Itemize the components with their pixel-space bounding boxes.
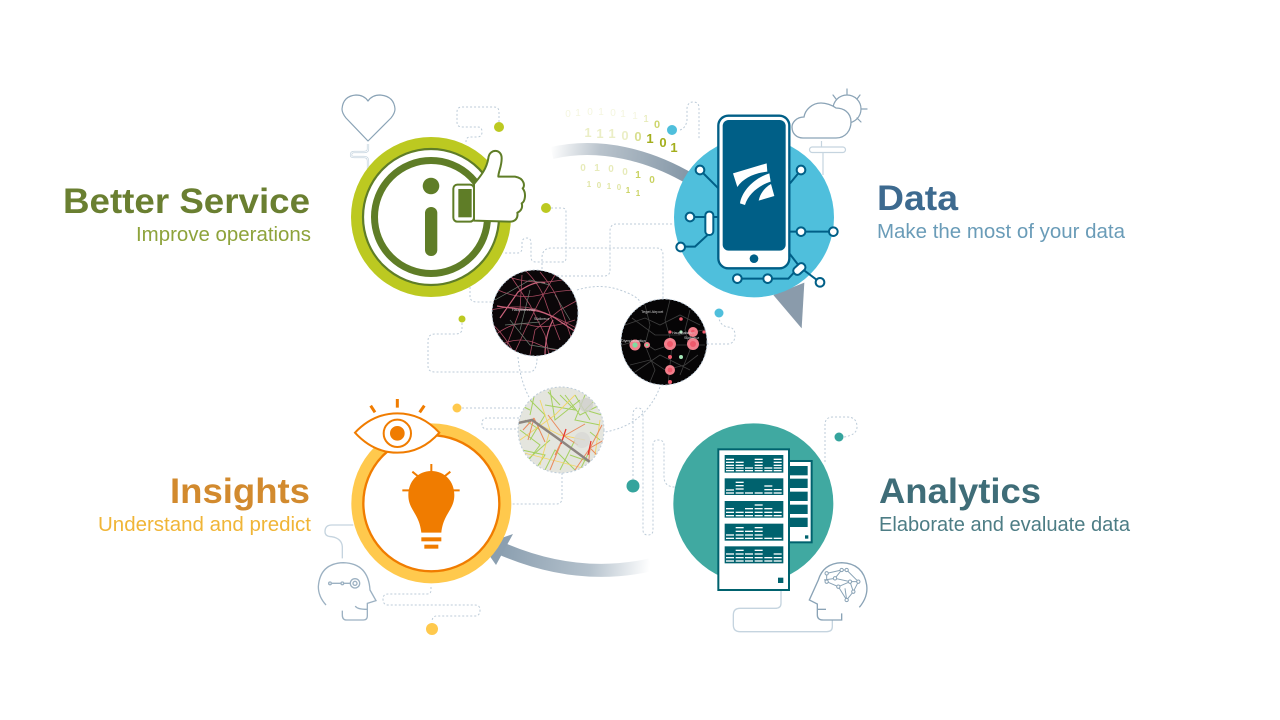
- map: station hot spots: Hauptbahnhof: [672, 331, 695, 335]
- panel: analytics icon: [673, 423, 867, 632]
- icon: front server: [718, 449, 789, 590]
- server level bars: [726, 459, 782, 562]
- heading: better service: Improve operations: [136, 224, 311, 246]
- panel: data icon: [674, 116, 838, 328]
- panel: better service icon: [342, 95, 525, 297]
- tube below server: [733, 591, 832, 632]
- heading: data: [877, 179, 1126, 243]
- map: station hot spots: Olympiastadion: [621, 339, 646, 343]
- icon: smartphone: [718, 116, 789, 268]
- heading: analytics: Analytics: [879, 472, 1041, 511]
- binary digits: 10: [635, 170, 655, 186]
- binary digits: 0: [634, 129, 642, 144]
- heading: insights: Insights: [170, 472, 310, 511]
- icon: cloud and sun: [792, 89, 867, 175]
- circuit traces: [681, 170, 833, 282]
- binary digits: 0: [654, 119, 660, 131]
- icon: speech tail: [773, 283, 804, 328]
- map: station hot spots: Tegel Airport: [641, 309, 664, 314]
- icon: tube to head: [325, 525, 353, 558]
- icon: head with node line: [318, 563, 376, 620]
- heading: analytics: Elaborate and evaluate data: [879, 514, 1131, 536]
- icon: light bulb: [402, 464, 460, 549]
- icon: ring: [351, 423, 511, 583]
- panel: insights icon: [318, 399, 511, 620]
- heading: insights: [98, 472, 311, 536]
- map: station hot spots: Südkreuz: [684, 336, 699, 340]
- heading: insights: Understand and predict: [98, 514, 311, 536]
- arrow: analytics to insights: [482, 534, 650, 570]
- binary digits: 101: [646, 131, 678, 155]
- binary digits: 0100: [580, 163, 628, 178]
- binary digits: [565, 107, 678, 198]
- map: road network: Südkreuz: [534, 317, 549, 321]
- circle background: [673, 423, 833, 583]
- icon: head with brain network: [809, 563, 867, 620]
- heading: better service: Better Service: [63, 182, 310, 221]
- icon: eye: [355, 399, 439, 453]
- icon: thumbs up: [453, 151, 525, 222]
- heading: analytics: [879, 472, 1131, 536]
- arrow: data to better service: [552, 149, 692, 180]
- map dashed outlines: [492, 270, 707, 473]
- binary digits: 1110: [584, 125, 629, 143]
- binary digits: 0101011: [565, 107, 638, 122]
- heading: data: Make the most of your data: [877, 221, 1126, 243]
- heading: data: Data: [877, 179, 959, 218]
- dashed connector network: [383, 102, 857, 622]
- heading: better service: [63, 182, 311, 246]
- map: road network: Hauptbahnhof: [512, 308, 535, 312]
- phone logo: [733, 163, 774, 205]
- icon: heart: [342, 95, 395, 172]
- map: traffic flow: [518, 387, 604, 473]
- circle background: [674, 137, 834, 297]
- binary digits: 11: [626, 186, 641, 198]
- map: road network: [490, 270, 580, 360]
- map: station hot spots: [621, 299, 707, 385]
- icon: info ring: [351, 137, 511, 297]
- icon: back server: [787, 461, 812, 542]
- connector dots: [426, 122, 844, 635]
- binary digits: 1010: [587, 180, 622, 192]
- binary digits: 1: [643, 114, 649, 125]
